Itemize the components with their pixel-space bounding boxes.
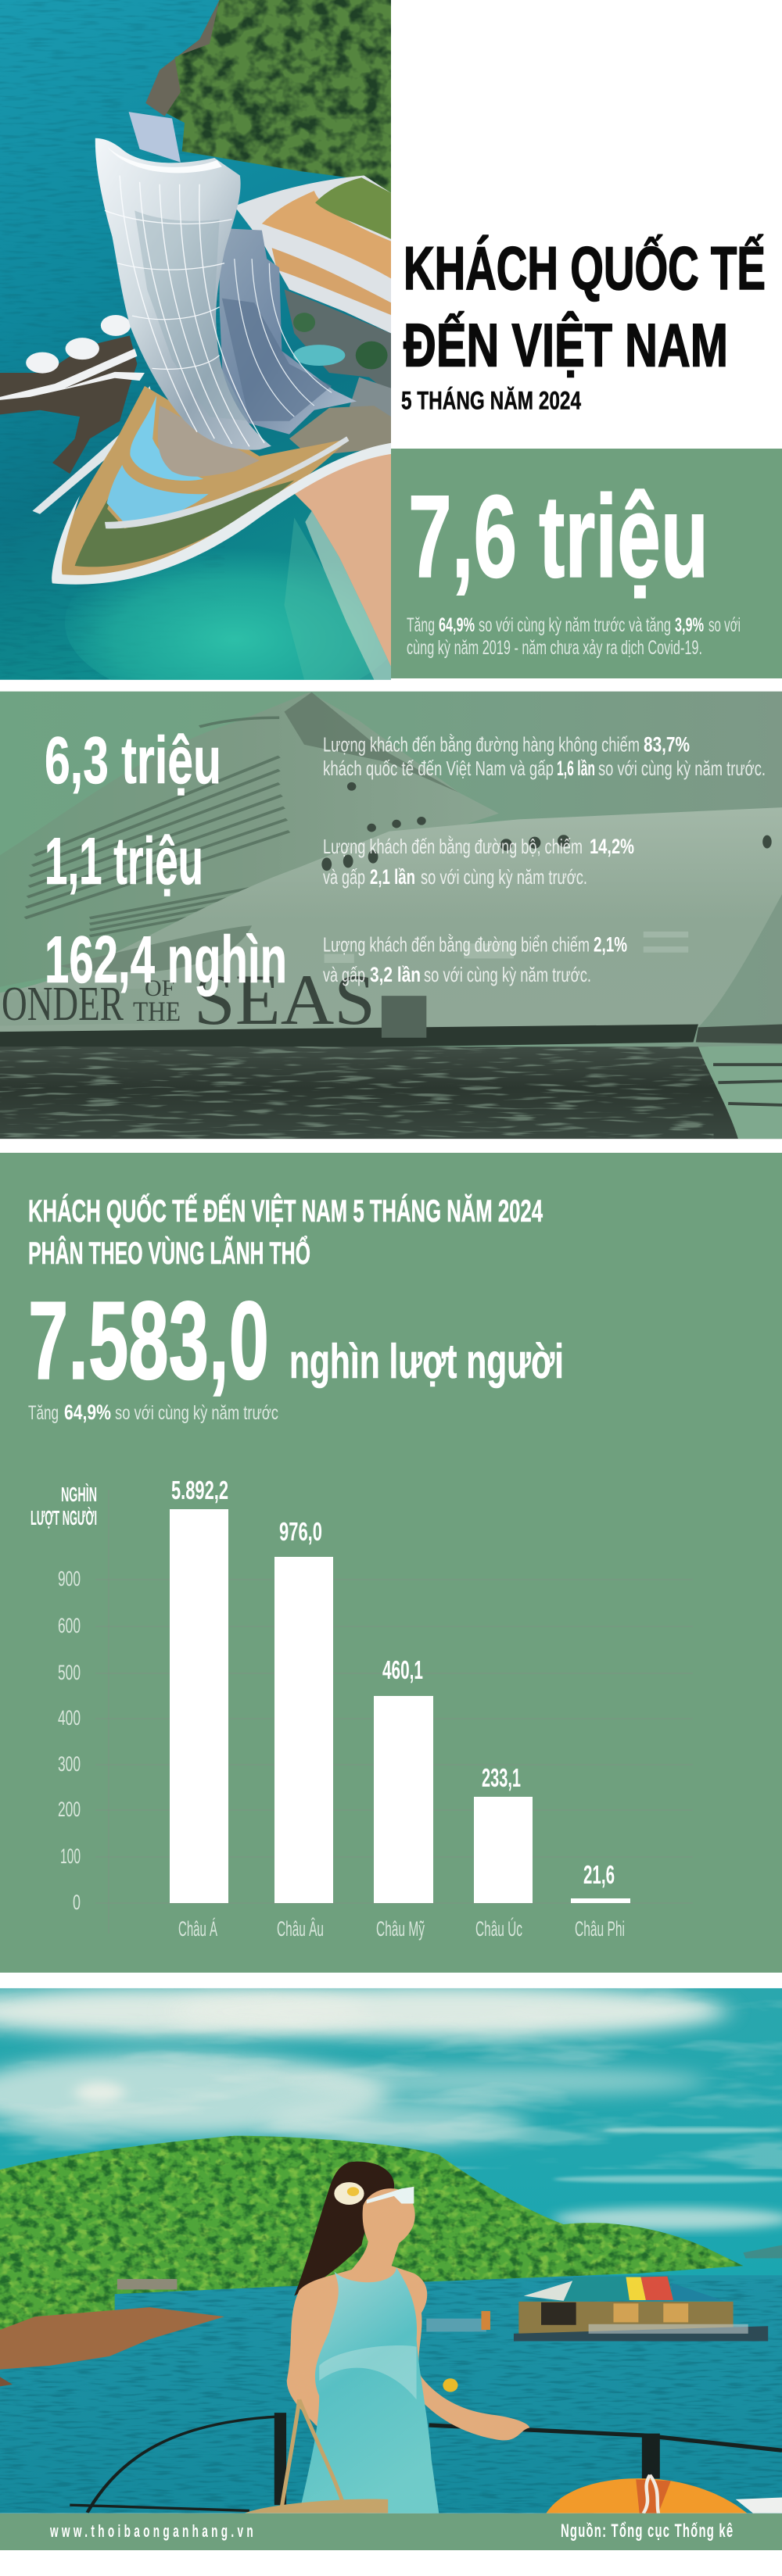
big number <box>28 1279 564 1403</box>
growth note <box>28 1401 278 1424</box>
stat: sea: 3,2 lần <box>370 963 421 986</box>
floating house <box>426 2276 768 2341</box>
y axis ticks: 500 <box>58 1661 81 1684</box>
y axis ticks: 900 <box>58 1567 81 1590</box>
photo: cruise ship <box>0 692 782 1140</box>
stat: air: 1,6 lần <box>557 757 595 780</box>
bar: Châu Úc: Châu Úc <box>475 1916 522 1941</box>
bar: Châu Mỹ <box>374 1655 433 1941</box>
stat: sea <box>45 923 627 997</box>
bar: Châu Mỹ: Châu Mỹ <box>376 1917 425 1941</box>
stat: air: khách quốc tế đến Việt Nam và gấp <box>323 757 554 780</box>
y axis ticks: 600 <box>58 1614 81 1637</box>
description: so với <box>708 614 741 636</box>
panel: total arrivals <box>391 449 782 678</box>
y axis ticks <box>58 1567 81 1914</box>
website: www.thoibaonganhang.vn <box>49 2521 253 2541</box>
stat: sea: và gấp <box>323 963 365 986</box>
stat: road: Lượng khách đến bằng đường bộ, chiếm <box>323 835 583 858</box>
growth note: 64,9% <box>64 1401 111 1424</box>
bar: Châu Mỹ: 460,1 <box>382 1655 423 1684</box>
stat: air: 6,3 triệu <box>45 724 221 798</box>
terraces <box>235 175 391 456</box>
stat: sea: Lượng khách đến bằng đường biển chiếm <box>323 933 590 957</box>
big number: 7.583,0 <box>28 1279 269 1403</box>
bar: Châu Úc <box>474 1763 533 1941</box>
y axis title: NGHÌN <box>61 1483 97 1506</box>
stat: road: 14,2% <box>590 835 634 858</box>
ship name on hull: ONDER <box>2 978 124 1031</box>
y axis ticks: 300 <box>58 1752 81 1776</box>
life ring <box>546 2478 747 2513</box>
bar: Châu Á: 5.892,2 <box>171 1476 228 1504</box>
stat: sea: 2,1% <box>594 933 627 957</box>
stat: road: 2,1 lần <box>370 865 415 889</box>
stat: road <box>45 825 634 899</box>
description <box>407 614 741 659</box>
growth note: so với cùng kỳ năm trước <box>115 1402 278 1424</box>
stat: air <box>45 724 766 798</box>
main sail tower <box>95 138 271 450</box>
railing <box>70 2413 782 2513</box>
ship name on hull: OF <box>145 975 174 1001</box>
y axis ticks: 400 <box>58 1706 81 1730</box>
bar: Châu Á: Châu Á <box>178 1917 217 1941</box>
ship name on hull: SEAS <box>194 960 375 1039</box>
heading <box>28 1193 543 1271</box>
stat: sea: 162,4 nghìn <box>45 923 287 997</box>
bar: Châu Phi: Châu Phi <box>575 1917 625 1941</box>
stat: road: so với cùng kỳ năm trước. <box>421 865 587 889</box>
resort platform <box>52 386 391 585</box>
woman <box>245 2162 529 2513</box>
bar chart: LƯỢT NGƯỜI <box>30 1506 97 1530</box>
y axis ticks: 100 <box>60 1844 81 1868</box>
description: 64,9% <box>439 614 475 636</box>
bar chart <box>30 1476 693 1941</box>
y axis title <box>30 1483 97 1530</box>
stat: sea: so với cùng kỳ năm trước. <box>424 963 591 986</box>
bar: Châu Âu <box>274 1517 333 1941</box>
growth note: Tăng <box>28 1402 59 1424</box>
footer band <box>0 2513 782 2550</box>
bar: Châu Âu: 976,0 <box>279 1517 322 1546</box>
source: Nguồn: Tổng cục Thống kê <box>561 2521 733 2542</box>
second tower <box>220 228 357 435</box>
bar: Châu Phi: 21,6 <box>583 1860 615 1889</box>
stat: road: 1,1 triệu <box>45 825 203 899</box>
photo: tourist on boat at island <box>0 1985 782 2517</box>
bar: Châu Phi <box>571 1860 630 1941</box>
description: 3,9% <box>675 614 704 636</box>
big number: nghìn lượt người <box>289 1335 564 1389</box>
panel: arrivals by transport, ship photo <box>0 692 782 1140</box>
ship name on hull <box>2 960 375 1039</box>
heading: PHÂN THEO VÙNG LÃNH THỔ <box>28 1234 310 1271</box>
photo: seaside resort tower <box>0 0 404 707</box>
stat: air: 83,7% <box>644 733 690 757</box>
bar: Châu Âu: Châu Âu <box>277 1916 324 1941</box>
y axis ticks: 200 <box>58 1798 81 1821</box>
stat: air: Lượng khách đến bằng đường hàng không chiếm <box>323 733 640 757</box>
y axis ticks: 0 <box>73 1891 81 1914</box>
description: so với cùng kỳ năm trước và tăng <box>479 614 671 636</box>
panel: arrivals by region <box>0 1153 782 1973</box>
panel: title <box>401 234 766 414</box>
rocks and pier <box>0 315 152 514</box>
stat: road: và gấp <box>323 865 365 889</box>
back tower <box>129 112 181 163</box>
ship name on hull: THE <box>133 996 181 1027</box>
bar: Châu Á <box>170 1476 228 1941</box>
description: Tăng <box>407 614 435 636</box>
bar: Châu Úc: 233,1 <box>482 1763 521 1792</box>
subtitle: 5 THÁNG NĂM 2024 <box>401 386 581 414</box>
